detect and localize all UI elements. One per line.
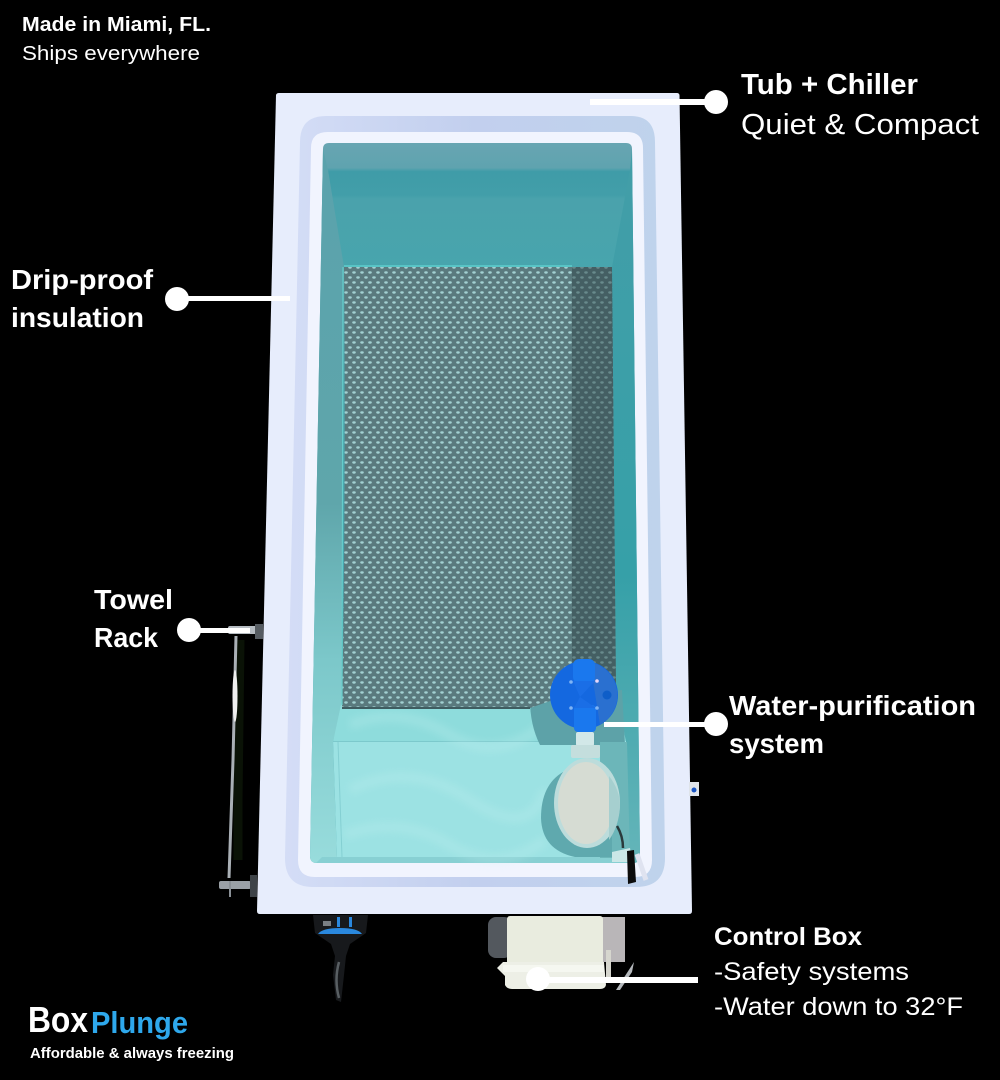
corner cable clips	[612, 826, 646, 884]
callout: control box	[526, 923, 963, 1021]
callout: drip-proof insulation: Drip-proof	[11, 264, 154, 295]
callout: tub and chiller: Tub + Chiller	[741, 69, 918, 101]
heading: origin	[22, 14, 211, 65]
side port	[689, 782, 699, 796]
callout: towel rack: Rack	[94, 622, 158, 653]
callout: control box: Control Box	[714, 923, 862, 951]
water ripples	[345, 717, 550, 859]
filter shadow	[541, 772, 612, 857]
logo: BoxPlunge: Affordable & always freezing	[30, 1045, 234, 1062]
bottom mat	[342, 266, 616, 708]
callout: towel rack: Towel	[94, 584, 173, 615]
right wall	[612, 149, 640, 863]
step seat	[333, 741, 628, 858]
callout: tub and chiller: Quiet & Compact	[741, 109, 979, 141]
callout: water purification system: system	[729, 728, 824, 759]
callout: water purification system	[604, 690, 976, 759]
heading: origin: Ships everywhere	[22, 43, 200, 65]
towel rack	[219, 624, 263, 897]
mat shaded section	[572, 267, 616, 692]
callout: water purification system: Water-purification	[729, 690, 976, 721]
callout: drip-proof insulation	[11, 264, 290, 333]
logo: BoxPlunge: Box	[28, 999, 88, 1040]
tub outer shell	[257, 93, 692, 914]
rear hose fitting	[313, 915, 368, 1002]
callout: control box: -Safety systems	[714, 958, 909, 986]
heading: origin: Made in Miami, FL.	[22, 14, 211, 36]
floor strip	[333, 700, 626, 742]
blue pump	[550, 659, 618, 732]
callout: towel rack	[94, 584, 250, 653]
water purification filter	[554, 758, 620, 848]
logo: BoxPlunge: Plunge	[91, 1005, 188, 1040]
control box	[488, 916, 634, 990]
tub and chiller photo	[219, 93, 699, 1002]
water basin	[310, 143, 640, 863]
tub recessed channel	[285, 116, 665, 887]
pump shadow on floor	[530, 690, 625, 745]
callout: control box: -Water down to 32°F	[714, 993, 963, 1021]
callout: tub and chiller	[590, 69, 979, 141]
tub inner rim	[298, 132, 652, 877]
left wall	[310, 149, 344, 863]
filter connector	[571, 732, 600, 758]
back wall	[310, 143, 640, 863]
right floor shadow	[600, 742, 630, 858]
logo: BoxPlunge	[28, 999, 234, 1062]
callout: drip-proof insulation: insulation	[11, 302, 144, 333]
